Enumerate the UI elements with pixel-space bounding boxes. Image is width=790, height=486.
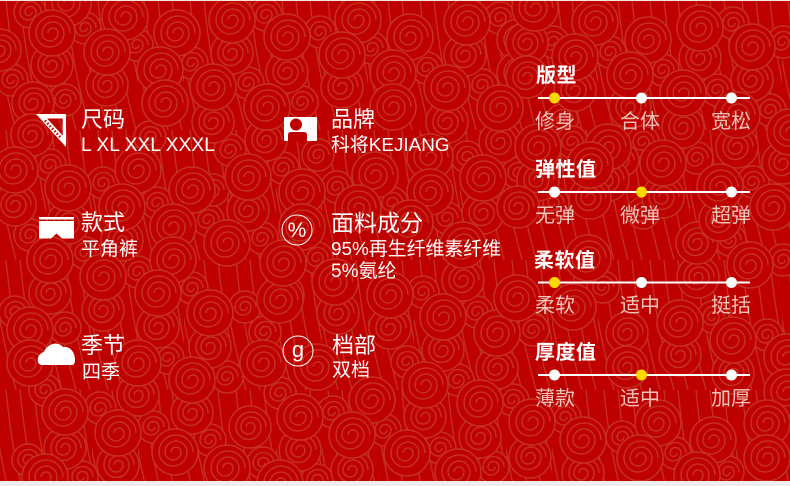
scale: softness: [534, 249, 751, 317]
labels: fit: 修身: [535, 110, 575, 133]
labels: thickness: 加厚: [711, 387, 751, 410]
brand value: 科将KEJIANG: [331, 134, 450, 156]
icon: brand card: [284, 117, 317, 141]
labels: softness: [535, 294, 751, 317]
icon: letter g: g: [292, 337, 304, 362]
labels: softness: 适中: [620, 294, 660, 317]
spec: brand: [284, 107, 450, 156]
labels: thickness: 薄款: [535, 387, 575, 410]
scale: elasticity: [535, 158, 751, 227]
heading: thickness: 厚度值: [535, 341, 596, 364]
icon: cloud: [38, 344, 75, 365]
spec: fabric composition: [282, 210, 501, 282]
labels: fit: 合体: [620, 110, 660, 133]
heading: elasticity: 弹性值: [535, 158, 596, 181]
slider: fit: [538, 92, 750, 104]
spec: season: [38, 333, 125, 383]
slider: elasticity: [538, 186, 750, 198]
labels: elasticity: 无弹: [535, 204, 575, 227]
labels: elasticity: [535, 204, 751, 227]
season value: 四季: [82, 361, 120, 383]
labels: elasticity: 超弹: [711, 204, 751, 227]
heading: style: 款式: [81, 210, 125, 235]
style value: 平角裤: [81, 238, 138, 260]
fabric line 2: 5%氨纶: [331, 260, 396, 282]
labels: softness: 挺括: [711, 294, 751, 317]
heading: size: 尺码: [81, 107, 125, 132]
scale: fit: [535, 64, 751, 133]
spec: style: [39, 210, 138, 260]
slider: softness: [538, 277, 750, 288]
icon: percent: [282, 215, 312, 245]
heading: softness: 柔软值: [534, 249, 596, 272]
crotch value: 双档: [332, 359, 370, 381]
size values: L XL XXL XXXL: [81, 135, 215, 156]
labels: fit: [535, 110, 751, 133]
labels: thickness: 适中: [620, 387, 660, 410]
heading: brand: 品牌: [331, 107, 375, 132]
heading: fit: 版型: [536, 64, 577, 87]
scale: thickness: [535, 341, 751, 410]
icon: shorts: [39, 217, 74, 238]
fabric line 1: 95%再生纤维素纤维: [331, 238, 501, 260]
spec: crotch: [283, 333, 376, 381]
heading: fabric composition: 面料成分: [331, 210, 423, 236]
slider: thickness: [538, 370, 750, 380]
labels: softness: 柔软: [535, 294, 575, 317]
icon: set square ruler: [36, 114, 66, 147]
heading: crotch: 档部: [332, 333, 376, 358]
labels: thickness: [535, 387, 751, 410]
labels: fit: 宽松: [711, 110, 751, 133]
heading: season: 季节: [81, 333, 125, 358]
spec: size: [36, 107, 215, 156]
icon: percent: %: [288, 219, 306, 242]
labels: elasticity: 微弹: [620, 204, 660, 227]
